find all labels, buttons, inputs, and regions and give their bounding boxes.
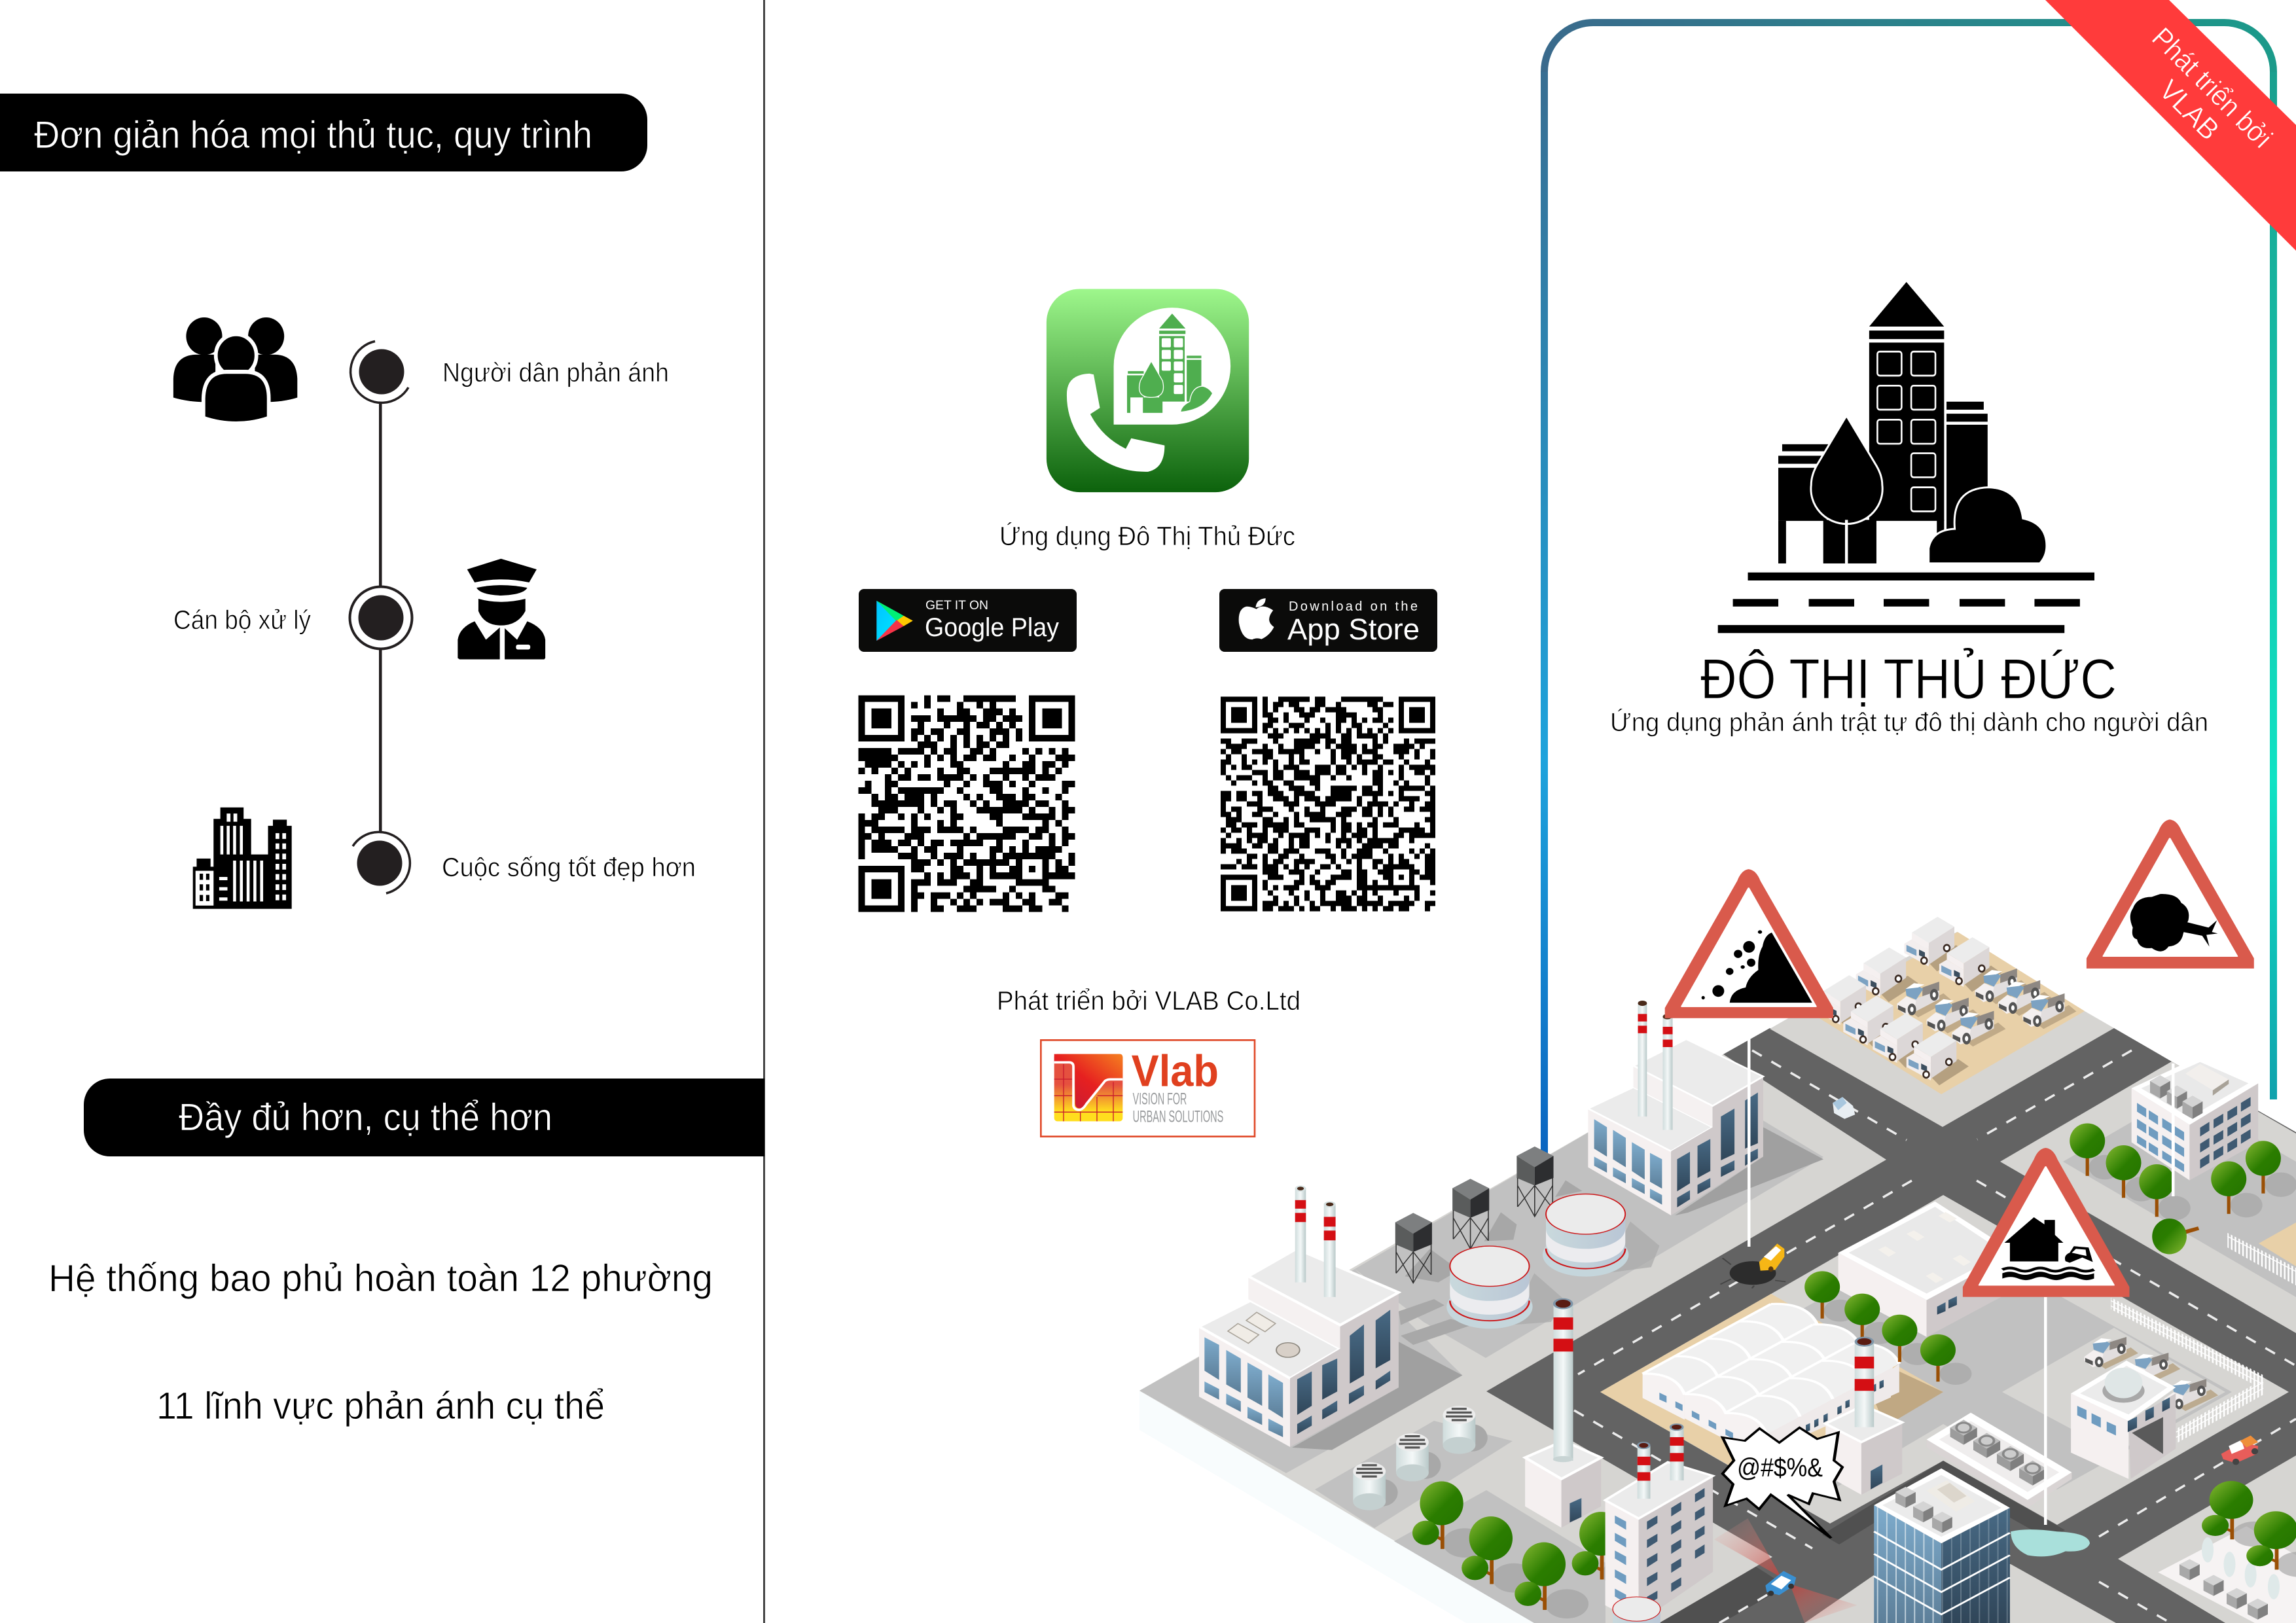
panel: middle app download panel bbox=[859, 289, 1437, 1137]
step label: better life: Cuộc sống tốt đẹp hơn bbox=[442, 852, 696, 882]
step label: officer handles: Cán bộ xử lý bbox=[173, 605, 311, 635]
badge: App Store bbox=[1219, 589, 1437, 652]
lower building with chimneys bbox=[1605, 1423, 1713, 1623]
icon: people bbox=[173, 317, 297, 423]
QR code: App Store bbox=[1221, 696, 1435, 911]
logo: Vlab bbox=[1041, 1040, 1255, 1137]
panel: left process panel bbox=[0, 94, 764, 1427]
timeline node 1 bbox=[351, 342, 408, 402]
factory: upper bbox=[1588, 1001, 1823, 1215]
timeline line bbox=[379, 403, 382, 832]
logo: Vlab: URBAN SOLUTIONS bbox=[1133, 1107, 1223, 1126]
heading banner: simplify procedures bbox=[0, 94, 647, 171]
badge: App Store: Download on the bbox=[1289, 599, 1418, 614]
speech bubble: @#$%& bbox=[1737, 1454, 1823, 1482]
ribbon: developed by VLAB: Phát triển bởi bbox=[2145, 22, 2278, 154]
logo: Vlab: VISION FOR bbox=[1133, 1090, 1187, 1108]
text: 11 report categories: 11 lĩnh vực phản ánh cụ thể bbox=[156, 1385, 605, 1427]
city ground and blocks bbox=[1139, 932, 2296, 1623]
street vehicles, pothole and police lights bbox=[1714, 1243, 1857, 1623]
heading banner: more complete bbox=[84, 1079, 764, 1156]
warning sign: falling rocks bbox=[1665, 869, 1833, 1018]
icon: city buildings bbox=[193, 808, 292, 909]
central building and warehouse bbox=[1643, 1202, 2015, 1495]
road centre dashes bbox=[1574, 1050, 2296, 1623]
warning sign: flood bbox=[1963, 1148, 2129, 1297]
warning sign: falling tree bbox=[2087, 819, 2254, 969]
title: ĐÔ THỊ THỦ ĐỨC bbox=[1700, 648, 2117, 711]
step label: citizens report: Người dân phản ánh bbox=[442, 357, 669, 387]
logo: Vlab: Vlab bbox=[1132, 1046, 1219, 1096]
heading banner: simplify procedures: Đơn giản hóa mọi thủ tục, quy trình bbox=[34, 114, 592, 156]
badge: App Store: App Store bbox=[1287, 613, 1420, 646]
speech bubble bbox=[1723, 1427, 1842, 1538]
text: coverage of 12 wards: Hệ thống bao phủ hoàn toàn 12 phường bbox=[48, 1257, 713, 1300]
badge: Google Play: Google Play bbox=[925, 613, 1059, 642]
timeline node 3 bbox=[353, 832, 410, 893]
subtitle: Ứng dụng phản ánh trật tự đô thị dành cho người dân bbox=[1610, 707, 2208, 737]
AC platform, gate building, fence, skyscraper bbox=[1874, 1298, 2296, 1623]
ribbon: developed by VLAB bbox=[2045, 0, 2296, 251]
ribbon: developed by VLAB: VLAB bbox=[2153, 74, 2225, 147]
icon: officer bbox=[457, 559, 545, 660]
QR code: Google Play bbox=[859, 696, 1075, 912]
timeline node 2 bbox=[350, 586, 412, 649]
label: developed by VLAB: Phát triển bởi VLAB Co.Ltd bbox=[997, 986, 1300, 1016]
panel: right cover panel bbox=[1544, 0, 2296, 1158]
illustration: isometric city bbox=[1139, 819, 2296, 1623]
sign posts bbox=[1748, 1039, 2174, 1525]
gradient frame border bbox=[1544, 22, 2274, 1158]
icon: green app icon bbox=[1047, 289, 1249, 492]
factory: lower left, towers, tanks, vents, trees bbox=[1199, 1147, 1660, 1618]
badge: Google Play bbox=[859, 589, 1077, 652]
badge: Google Play: GET IT ON bbox=[925, 599, 988, 613]
icon: city logo bbox=[1718, 282, 2094, 633]
building and trees: top right block bbox=[1833, 1056, 2296, 1285]
heading banner: more complete: Đầy đủ hơn, cụ thể hơn bbox=[179, 1096, 552, 1139]
parking lot: trucks and pickups bbox=[1816, 917, 2076, 1085]
divider between left panel and middle panel bbox=[763, 0, 765, 1623]
label: app name: Ứng dụng Đô Thị Thủ Đức bbox=[999, 521, 1295, 551]
